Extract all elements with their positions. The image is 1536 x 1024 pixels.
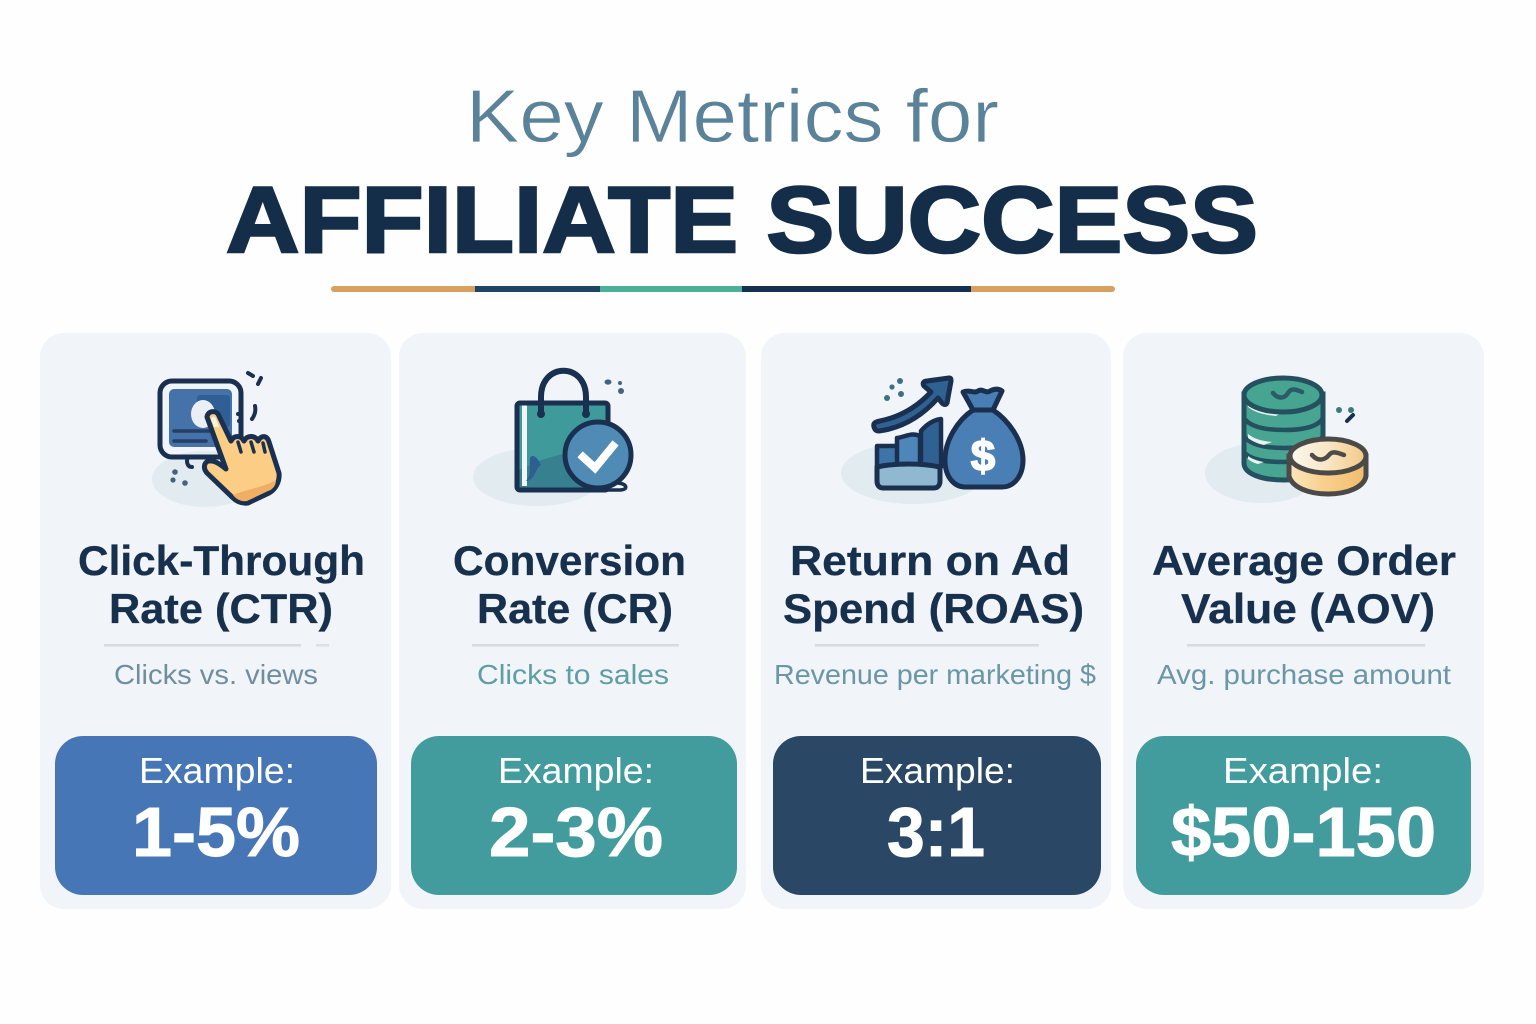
panel: return on ad spend [761, 333, 1111, 909]
description: Avg. purchase amount [1157, 659, 1451, 690]
dollar sign: $ [971, 432, 995, 481]
metric name: Average Order [1152, 537, 1456, 584]
icon: shopping bag with check [473, 371, 631, 506]
example box: Example: [498, 750, 654, 791]
icon: stacked coins [1205, 378, 1366, 503]
example box: 3:1 [887, 793, 985, 871]
title line 2: AFFILIATE SUCCESS [226, 167, 1258, 272]
example box [55, 736, 377, 895]
panel: click-through rate [40, 333, 391, 909]
example box: 2-3% [489, 793, 663, 871]
description: Clicks to sales [477, 659, 669, 690]
metric name: Spend (ROAS) [783, 585, 1084, 632]
example box: 1-5% [132, 793, 300, 871]
description: Revenue per marketing $ [774, 659, 1096, 690]
example box: Example: [1223, 750, 1383, 791]
title [226, 74, 1258, 272]
metric name: Return on Ad [790, 537, 1070, 584]
example box [773, 736, 1101, 895]
icon: hand clicking a screen [152, 373, 279, 507]
panel: conversion rate [399, 333, 746, 909]
metric name [78, 537, 365, 632]
example box: $50-150 [1171, 793, 1436, 871]
title line 1: Key Metrics for [466, 74, 999, 158]
metric name [783, 537, 1084, 632]
metric name [1152, 537, 1456, 632]
metric name [453, 537, 686, 632]
metric name: Rate (CR) [477, 585, 673, 632]
example box: Example: [139, 750, 295, 791]
example box: Example: [860, 750, 1015, 791]
metric name: Value (AOV) [1181, 585, 1435, 632]
example box [1136, 736, 1471, 895]
metric name: Rate (CTR) [109, 585, 333, 632]
metric name: Click-Through [78, 537, 365, 584]
metric name: Conversion [453, 537, 686, 584]
example box [411, 736, 737, 895]
title underline [331, 286, 1115, 292]
panel: average order value [1123, 333, 1484, 909]
description: Clicks vs. views [114, 659, 318, 690]
icon: growth chart and money bag [841, 378, 1023, 504]
